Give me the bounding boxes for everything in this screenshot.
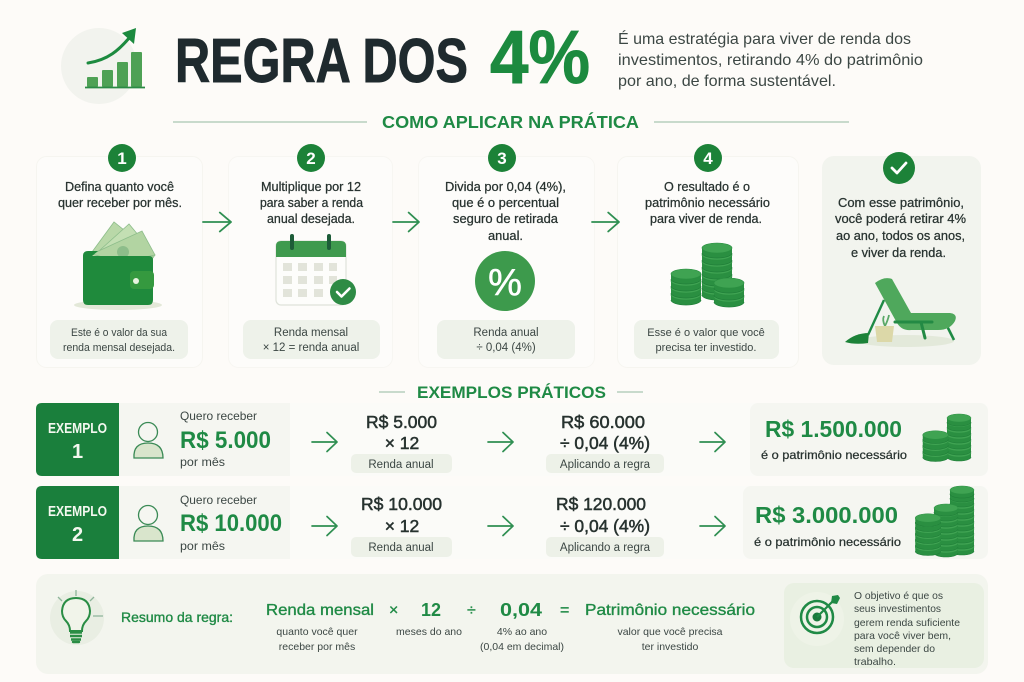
icon: check badge xyxy=(883,152,915,184)
monthly income 1: por mês xyxy=(180,455,225,469)
calculation: rule 2 xyxy=(546,494,664,557)
result text: você poderá retirar 4% xyxy=(835,212,966,226)
result text: e viver da renda. xyxy=(851,246,946,260)
monthly income 2 xyxy=(180,493,282,553)
calculation: annual income 2: × 12 xyxy=(385,516,419,536)
badge: number 3 xyxy=(488,144,516,172)
calculation: annual income 1: Renda anual xyxy=(368,459,434,471)
calculation: annual income 1: × 12 xyxy=(385,433,419,453)
badge: example 2: 2 xyxy=(72,524,83,546)
intro text xyxy=(618,29,923,90)
result 2 xyxy=(743,486,988,559)
icon: coins 1 xyxy=(923,414,971,462)
step 1 text xyxy=(58,180,182,210)
icon: person xyxy=(134,422,163,458)
step 2 text: para saber a renda xyxy=(260,196,363,210)
result 2: R$ 3.000.000 xyxy=(755,502,898,528)
badge: number 2 xyxy=(297,144,325,172)
goal text: sem depender do xyxy=(854,643,935,655)
term: monthly income: Renda mensal xyxy=(266,602,374,619)
badge: number 3: 3 xyxy=(497,149,507,168)
arrow xyxy=(700,516,725,536)
result 2: é o patrimônio necessário xyxy=(754,535,901,549)
result 1: é o patrimônio necessário xyxy=(761,448,907,462)
term: rate xyxy=(480,600,564,653)
badge: number 1 xyxy=(108,144,136,172)
note: step 2: × 12 = renda anual xyxy=(263,342,359,354)
calculation: rule 2: Aplicando a regra xyxy=(560,542,651,554)
badge: number 2: 2 xyxy=(306,149,316,168)
intro text: investimentos, retirando 4% do patrimônio xyxy=(618,52,923,69)
calculation: rule 2: R$ 120.000 xyxy=(556,494,646,514)
badge: example 2: EXEMPLO xyxy=(48,504,107,520)
note: step 1: Este é o valor da sua xyxy=(71,327,168,339)
panel: step 2 xyxy=(228,144,392,368)
term: rate: 0,04 xyxy=(500,600,542,620)
panel: step 4 xyxy=(618,144,798,368)
term: monthly income xyxy=(266,602,374,653)
operator: times: × xyxy=(389,602,398,619)
step 2 text: Multiplique por 12 xyxy=(261,180,361,194)
step 4 text: O resultado é o xyxy=(664,180,750,194)
note: step 3 xyxy=(437,320,575,359)
term: required wealth xyxy=(585,602,755,653)
step 1 text: quer receber por mês. xyxy=(58,196,182,210)
step 2 text xyxy=(260,180,363,226)
term: months xyxy=(396,600,462,638)
calculation: rule 2: ÷ 0,04 (4%) xyxy=(560,516,650,536)
badge: number 4 xyxy=(694,144,722,172)
panel: rule summary xyxy=(36,574,988,674)
monthly income 1: R$ 5.000 xyxy=(180,427,271,454)
badge: example 2 xyxy=(36,486,119,559)
icon: person xyxy=(134,506,163,541)
term: required wealth: ter investido xyxy=(642,641,698,653)
arrow xyxy=(488,432,513,452)
calculation: rule 1: R$ 60.000 xyxy=(561,412,645,432)
icon: lounge chair xyxy=(845,278,956,347)
step 3 text: Divida por 0,04 (4%), xyxy=(445,180,566,194)
step 3 text: seguro de retirada xyxy=(453,212,558,226)
term: required wealth: valor que você precisa xyxy=(617,626,723,638)
calculation: annual income 2: Renda anual xyxy=(368,542,434,554)
goal text xyxy=(854,590,960,668)
note: step 1: renda mensal desejada. xyxy=(63,342,175,354)
badge: example 1: EXEMPLO xyxy=(48,421,107,437)
operator: equals: = xyxy=(560,602,569,619)
arrow: step 1 to 2 xyxy=(203,212,231,232)
panel: result xyxy=(822,152,981,365)
panel: example 2 xyxy=(36,486,988,559)
heading: como aplicar: COMO APLICAR NA PRÁTICA xyxy=(382,111,639,132)
calculation: rule 1: ÷ 0,04 (4%) xyxy=(560,433,650,453)
panel: step 3 xyxy=(418,144,594,368)
term: months: 12 xyxy=(421,600,441,620)
callout: goal xyxy=(784,583,984,668)
goal text: O objetivo é que os xyxy=(854,590,943,602)
calculation: annual income 1: R$ 5.000 xyxy=(366,412,437,432)
term: rate: (0,04 em decimal) xyxy=(480,641,564,653)
note: step 3: ÷ 0,04 (4%) xyxy=(476,342,536,354)
goal text: trabalho. xyxy=(854,656,896,668)
badge: example 1: 1 xyxy=(72,441,83,463)
note: step 3: Renda anual xyxy=(473,327,539,339)
step 1 text: Defina quanto você xyxy=(65,180,174,194)
heading: exemplos: EXEMPLOS PRÁTICOS xyxy=(417,383,606,402)
note: step 2 xyxy=(243,320,380,359)
result 1: R$ 1.500.000 xyxy=(765,416,902,442)
panel: step 1 xyxy=(36,144,202,368)
title: 4% xyxy=(490,15,590,99)
monthly income 2: R$ 10.000 xyxy=(180,510,282,537)
arrow xyxy=(488,516,513,536)
result text: Com esse patrimônio, xyxy=(838,196,964,210)
arrow: step 2 to 3 xyxy=(393,212,419,232)
intro text: É uma estratégia para viver de renda dos xyxy=(618,29,911,48)
arrow xyxy=(700,432,725,452)
badge: number 1: 1 xyxy=(117,149,127,168)
note: step 4: Esse é o valor que você xyxy=(647,327,765,339)
monthly income 2: por mês xyxy=(180,539,225,553)
calculation: annual income 1 xyxy=(351,412,452,473)
icon: coins 2 xyxy=(915,486,974,557)
note: step 1 xyxy=(50,320,188,359)
title: REGRA DOS xyxy=(175,27,468,96)
term: monthly income: quanto você quer xyxy=(276,626,358,638)
result text xyxy=(835,196,966,260)
goal text: para você viver bem, xyxy=(854,630,951,642)
term: months: meses do ano xyxy=(396,626,462,638)
step 2 text: anual desejada. xyxy=(267,212,355,226)
step 4 text xyxy=(645,180,770,226)
icon: light bulb xyxy=(50,590,104,645)
icon: calendar xyxy=(276,236,356,305)
step 3 text xyxy=(445,180,566,243)
step 3 text: que é o percentual xyxy=(452,196,559,210)
term: rate: 4% ao ano xyxy=(497,626,547,638)
term: monthly income: receber por mês xyxy=(279,641,355,653)
note: step 4: precisa ter investido. xyxy=(656,342,756,354)
step 4 text: para viver de renda. xyxy=(650,212,762,226)
badge: number 4: 4 xyxy=(703,149,713,168)
arrow xyxy=(312,516,337,536)
operator: divide: ÷ xyxy=(467,602,476,619)
summary label: Resumo da regra: xyxy=(121,609,233,625)
calculation: rule 1: Aplicando a regra xyxy=(560,459,651,471)
calculation: rule 1 xyxy=(546,412,664,473)
icon: percent xyxy=(475,251,535,311)
calculation: annual income 2 xyxy=(351,494,452,557)
monthly income 1 xyxy=(180,409,271,469)
intro text: por ano, de forma sustentável. xyxy=(618,73,836,90)
icon: wallet xyxy=(74,222,162,310)
icon: target xyxy=(790,592,844,646)
note: step 4 xyxy=(634,320,779,359)
icon: coin stacks xyxy=(671,243,744,307)
calculation: annual income 2: R$ 10.000 xyxy=(361,494,442,514)
step 3 text: anual. xyxy=(488,229,523,243)
arrow: step 3 to 4 xyxy=(592,212,619,232)
monthly income 2: Quero receber xyxy=(180,493,257,507)
result 1 xyxy=(750,403,988,476)
badge: example 1 xyxy=(36,403,119,476)
arrow xyxy=(312,432,337,452)
note: step 2: Renda mensal xyxy=(274,327,348,339)
result text: ao ano, todos os anos, xyxy=(836,229,965,243)
step 4 text: patrimônio necessário xyxy=(645,196,770,210)
term: required wealth: Patrimônio necessário xyxy=(585,602,755,619)
goal text: gerem renda suficiente xyxy=(854,617,960,629)
icon: growth chart logo xyxy=(61,28,145,104)
monthly income 1: Quero receber xyxy=(180,409,257,423)
icon: percent: % xyxy=(488,262,522,304)
goal text: seus investimentos xyxy=(854,603,941,615)
panel: example 1 xyxy=(36,403,988,476)
